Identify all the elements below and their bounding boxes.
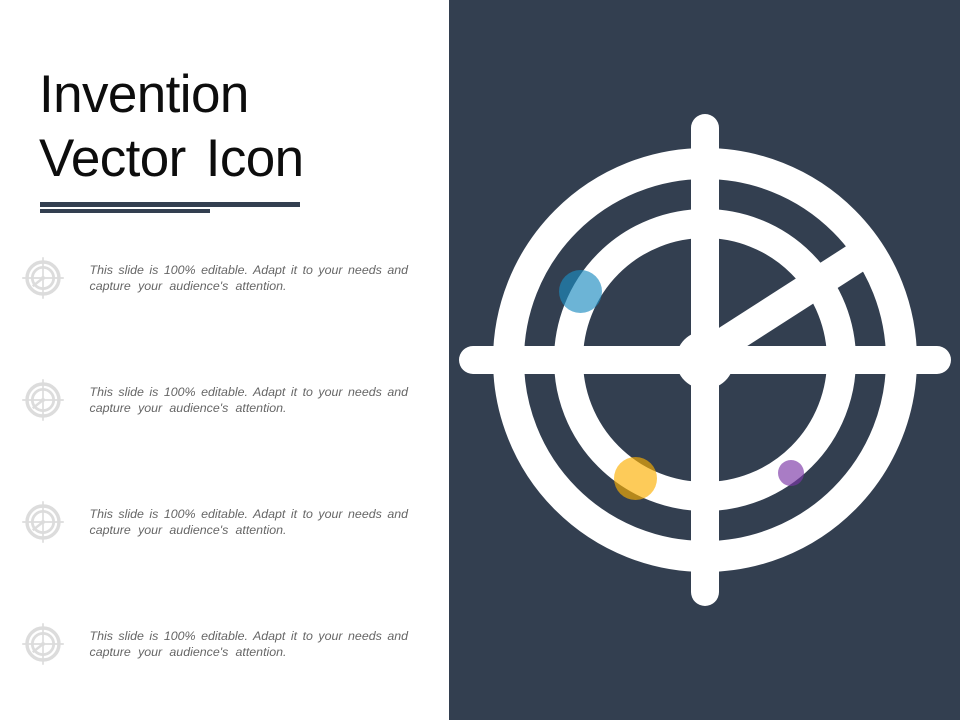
crosshair lines	[473, 128, 937, 592]
title underline	[40, 202, 300, 213]
diagonal hand	[705, 249, 870, 355]
icon: large target	[459, 114, 951, 606]
text block 2: capture your audience's attention.	[90, 401, 286, 415]
hub	[676, 331, 734, 389]
text block 3: This slide is 100% editable. Adapt it to your needs and	[90, 507, 408, 521]
title: Vector Icon	[39, 129, 304, 188]
text block 4: This slide is 100% editable. Adapt it to your needs and	[90, 629, 408, 643]
text block 4	[90, 629, 408, 659]
text block 3: capture your audience's attention.	[90, 523, 286, 537]
purple dot	[778, 460, 804, 486]
text block 1	[90, 263, 408, 293]
blue dot	[559, 270, 602, 313]
icon: small target 4	[22, 623, 64, 665]
text block 1: capture your audience's attention.	[90, 279, 286, 293]
title	[39, 65, 304, 188]
inner ring	[568, 224, 842, 496]
text block 3	[90, 507, 408, 537]
text block 4: capture your audience's attention.	[90, 645, 286, 659]
icon: small target 3	[22, 501, 64, 543]
outer ring	[508, 164, 902, 556]
icon: small target 1	[22, 257, 64, 299]
title: Invention	[39, 65, 249, 124]
panel: dark background	[449, 0, 960, 720]
text block 2: This slide is 100% editable. Adapt it to your needs and	[90, 385, 408, 399]
yellow dot	[614, 457, 657, 500]
icon: small target 2	[22, 379, 64, 421]
text block 2	[90, 385, 408, 415]
text block 1: This slide is 100% editable. Adapt it to your needs and	[90, 263, 408, 277]
